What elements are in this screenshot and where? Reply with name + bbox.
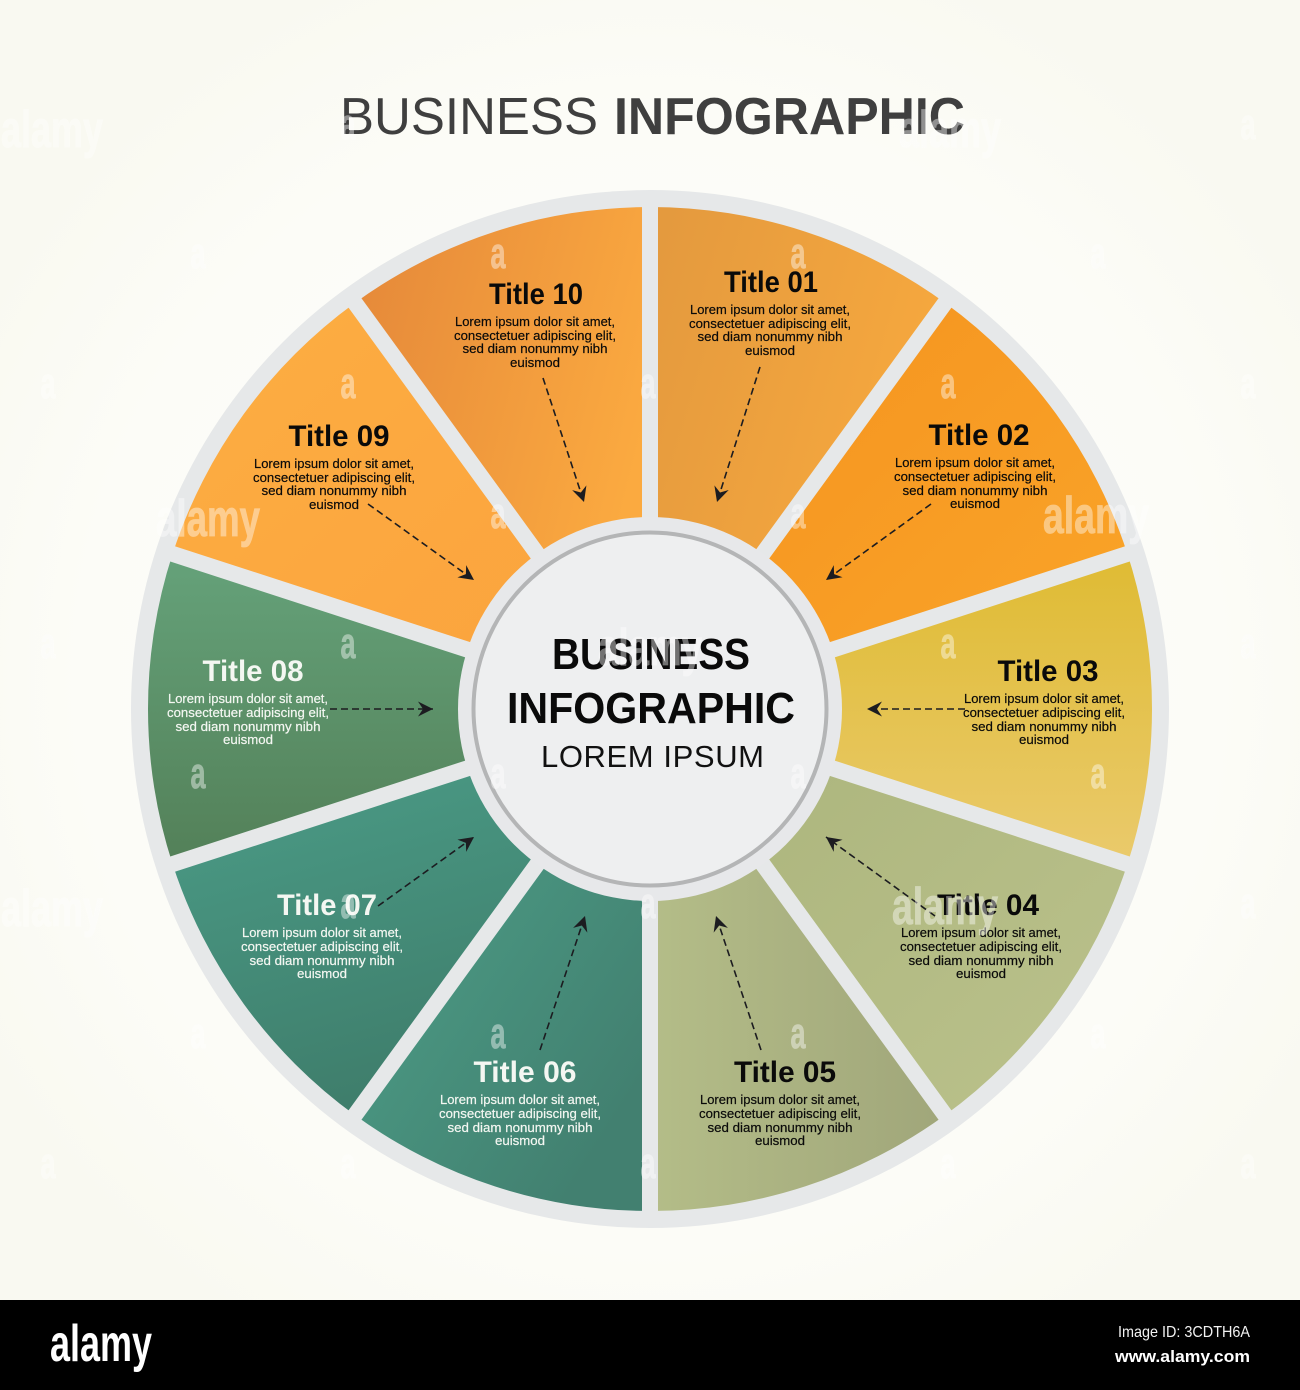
content: Title 07 [241,889,403,981]
content: Title 07: Title 07 [277,889,377,922]
content: Title 02: sed diam nonummy nibh [902,483,1048,498]
content: Title 07: sed diam nonummy nibh [250,953,394,968]
content: Title 04 [900,889,1062,981]
watermarks: a [190,229,206,278]
footer logo: alamy [50,1315,152,1373]
watermarks: a [940,359,956,408]
content: Title 01: Title 01 [724,266,818,299]
watermarks: alamy [1,880,103,938]
wedge 08 [148,554,469,864]
content: Title 01: Lorem ipsum dolor sit amet, [690,302,850,317]
watermarks: alamy [598,619,702,677]
wheel outer ring [131,190,1169,1228]
watermarks: a [340,1139,356,1188]
watermarks: alamy [156,490,260,548]
content: Title 05: sed diam nonummy nibh [708,1120,852,1135]
content: Title 08: euismod [223,732,273,747]
watermarks: a [1240,1139,1256,1188]
main title: INFOGRAPHIC [614,88,965,146]
content: Title 02: consectetuer adipiscing elit, [894,469,1056,484]
watermarks: a [640,359,656,408]
content: Title 01: euismod [745,343,795,358]
panel: Title 08 [148,554,469,864]
content: Title 07: euismod [297,966,347,981]
content: Title 02: Lorem ipsum dolor sit amet, [895,455,1055,470]
content: Title 10: Lorem ipsum dolor sit amet, [455,314,615,329]
content: Title 03: Lorem ipsum dolor sit amet, [964,691,1124,706]
arrow: Title 04 [826,837,935,916]
wedge 07 [173,768,538,1115]
panel: Title 03 [831,554,1152,864]
wedge 04 [762,768,1127,1115]
watermarks: a [40,619,56,668]
arrow: Title 10 [543,378,584,502]
center hub [458,517,842,901]
content: Title 02: Title 02 [928,419,1030,452]
watermarks: a [190,749,206,798]
watermarks: a [1090,749,1106,798]
content: Title 06: Title 06 [474,1056,576,1089]
content: Title 08: sed diam nonummy nibh [176,719,320,734]
content: Title 05 [699,1056,861,1148]
content: Title 07: consectetuer adipiscing elit, [241,939,403,954]
wedge 06 [355,863,650,1211]
content: Title 01: sed diam nonummy nibh [698,329,842,344]
panel: Title 10 [355,207,650,555]
panel: Title 05 [650,863,945,1211]
watermarks: a [490,229,506,278]
hub subtitle: LOREM IPSUM [541,739,764,774]
arrow: Title 07 [378,837,474,906]
watermarks: a [190,1009,206,1058]
wedge 02 [762,303,1127,650]
content: Title 05: Title 05 [734,1056,836,1089]
content: Title 04: consectetuer adipiscing elit, [900,939,1062,954]
arrow: Title 03 [867,708,965,710]
watermarks: a [940,1139,956,1188]
content: Title 03: Title 03 [998,655,1098,688]
footer url: www.alamy.com [1114,1347,1250,1366]
content: Title 06: consectetuer adipiscing elit, [439,1106,601,1121]
watermarks: a [640,879,656,928]
hub heading: BUSINESS [552,630,750,679]
content: Title 06: euismod [495,1133,545,1148]
arrow: Title 08 [330,708,433,710]
watermarks: alamy [1,101,103,159]
watermarks: a [340,619,356,668]
content: Title 10 [454,278,616,370]
wedge 03 [831,554,1152,864]
content: Title 05: consectetuer adipiscing elit, [699,1106,861,1121]
watermarks: a [1240,619,1256,668]
watermarks: a [640,1139,656,1188]
content: Title 09: Title 09 [288,420,390,453]
arrow: Title 02 [826,504,931,580]
watermarks [1,100,1256,1188]
watermarks: a [790,489,806,538]
content: Title 06 [439,1056,601,1148]
watermarks: a [790,229,806,278]
watermarks: a [1240,359,1256,408]
watermarks: alamy [1043,487,1149,545]
content: Title 10: Title 10 [489,278,583,311]
content: Title 06: Lorem ipsum dolor sit amet, [440,1092,600,1107]
content: Title 01 [689,266,851,358]
content: Title 03: consectetuer adipiscing elit, [963,705,1125,720]
content: Title 03: sed diam nonummy nibh [972,719,1116,734]
hub heading [507,630,795,733]
content: Title 09: sed diam nonummy nibh [262,483,406,498]
content: Title 02: euismod [950,496,1000,511]
content: Title 04: Lorem ipsum dolor sit amet, [901,925,1061,940]
panel: Title 07 [173,768,538,1115]
panel: Title 06 [355,863,650,1211]
watermarks: alamy [899,101,1001,159]
content: Title 10: sed diam nonummy nibh [462,341,608,356]
wedge 05 [650,863,945,1211]
content: Title 08: Title 08 [202,655,304,688]
hub heading: INFOGRAPHIC [507,684,795,733]
content: Title 09: Lorem ipsum dolor sit amet, [254,456,414,471]
content: Title 04: Title 04 [937,889,1039,922]
watermarks: a [40,359,56,408]
watermarks: a [40,1139,56,1188]
watermarks: a [340,879,356,928]
watermarks: a [1240,100,1256,149]
content: Title 01: consectetuer adipiscing elit, [689,316,851,331]
content: Title 08: Lorem ipsum dolor sit amet, [168,691,328,706]
arrow: Title 05 [716,916,761,1050]
watermarks: a [490,489,506,538]
content: Title 04: euismod [956,966,1006,981]
content: Title 04: sed diam nonummy nibh [908,953,1054,968]
content: Title 09: euismod [309,497,359,512]
wedge 01 [650,207,945,555]
watermarks: a [490,1009,506,1058]
watermarks: a [1090,229,1106,278]
content: Title 08 [167,655,329,747]
arrow: Title 01 [717,367,760,502]
arrow: Title 09 [368,504,474,580]
watermarks: a [1240,879,1256,928]
content: Title 09 [253,420,415,512]
footer bar [0,1300,1300,1390]
content: Title 09: consectetuer adipiscing elit, [253,470,415,485]
wedge 10 [355,207,650,555]
watermarks: a [790,1009,806,1058]
panel: Title 09 [173,303,538,650]
content: Title 06: sed diam nonummy nibh [448,1120,592,1135]
content: Title 07: Lorem ipsum dolor sit amet, [242,925,402,940]
content: Title 05: Lorem ipsum dolor sit amet, [700,1092,860,1107]
watermarks: alamy [892,878,998,936]
panel: Title 04 [762,768,1127,1115]
content: Title 10: consectetuer adipiscing elit, [454,328,616,343]
watermarks: a [340,100,356,149]
watermarks: a [1090,1009,1106,1058]
watermarks: a [940,619,956,668]
content: Title 05: euismod [755,1133,805,1148]
panel: Title 02 [762,303,1127,650]
wedge 09 [173,303,538,650]
content: Title 03: euismod [1019,732,1069,747]
main title [340,88,965,146]
content: Title 10: euismod [510,355,560,370]
panel: Title 01 [650,207,945,555]
footer image id: Image ID: 3CDTH6A [1118,1324,1250,1341]
watermarks: a [340,359,356,408]
main title: BUSINESS [340,88,598,146]
arrow: Title 06 [540,916,585,1050]
content: Title 02 [894,419,1056,511]
content: Title 03 [963,655,1125,747]
content: Title 08: consectetuer adipiscing elit, [167,705,329,720]
watermarks: a [790,749,806,798]
watermarks: a [490,749,506,798]
